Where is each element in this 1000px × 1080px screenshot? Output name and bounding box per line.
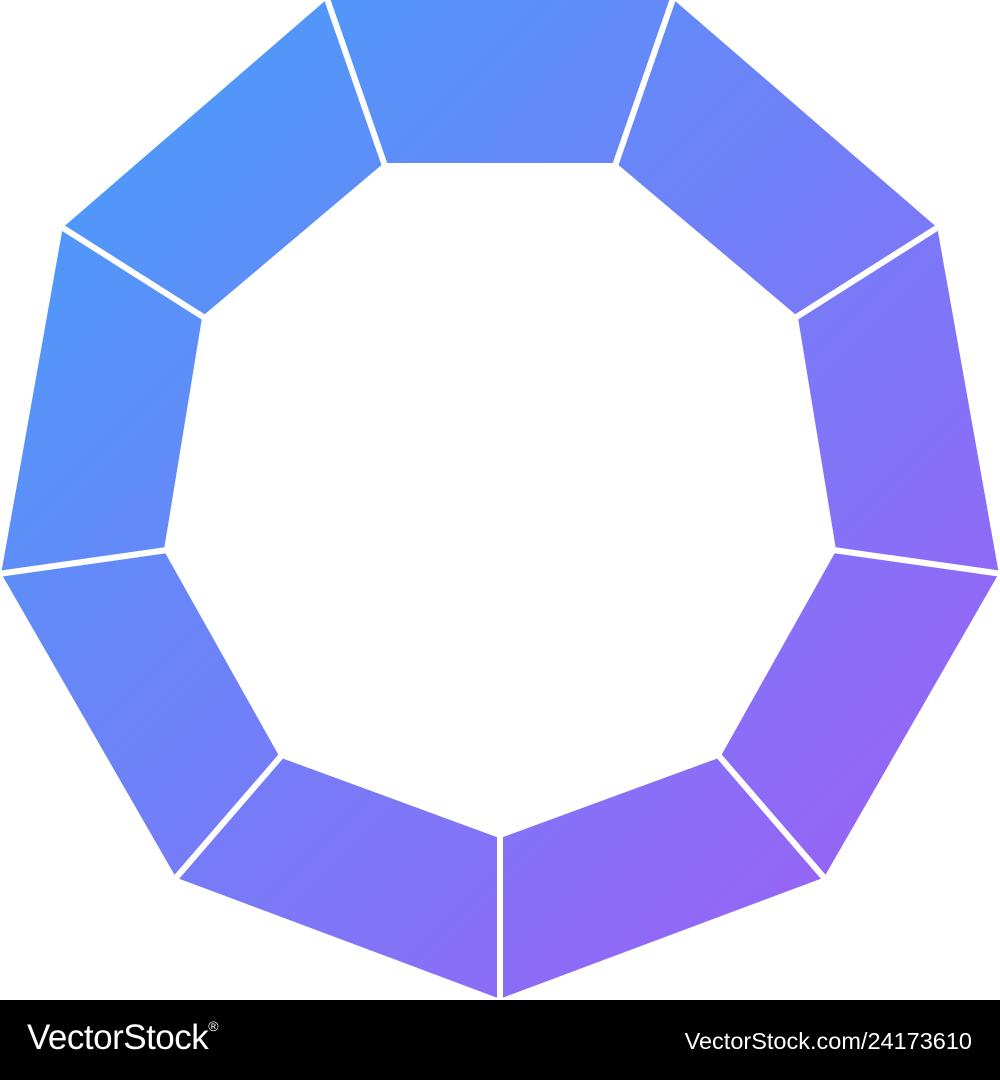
segment 8 <box>0 226 205 574</box>
logo text: VectorStock® <box>27 1018 218 1057</box>
segment 9 <box>60 0 385 318</box>
footer bar <box>0 1000 1000 1080</box>
segment 1 top <box>326 0 674 166</box>
url text: VectorStock.com/24173610 <box>685 1028 972 1054</box>
segment 3 <box>795 226 1000 574</box>
segment 6 <box>174 755 500 1002</box>
segment 4 <box>718 550 1000 880</box>
segment 7 <box>0 550 282 880</box>
segment 2 <box>615 0 940 318</box>
segment 5 <box>500 755 826 1002</box>
